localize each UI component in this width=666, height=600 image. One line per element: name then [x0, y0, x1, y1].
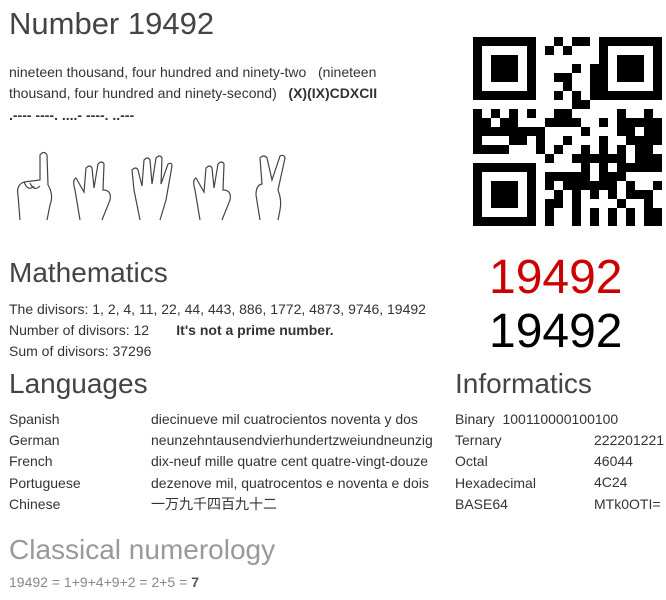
table: languages: Portuguese	[9, 475, 81, 491]
text: divisors	[9, 301, 426, 359]
QR code	[473, 37, 662, 226]
text: dix-neuf mille quatre cent quatre-vingt-douze	[151, 453, 428, 469]
text: 46044	[594, 453, 633, 469]
text: 222201221	[594, 432, 664, 448]
title: Number 19492	[9, 6, 214, 41]
table: languages: German	[9, 432, 60, 448]
heading: Languages: Languages	[9, 368, 148, 399]
table: languages	[9, 411, 81, 512]
text: MTk0OTI=	[594, 496, 661, 512]
table: informatics: Binary 100110000100100	[455, 411, 618, 427]
table: informatics: Octal	[455, 453, 488, 469]
table: informatics: Hexadecimal	[455, 475, 536, 491]
heading: Informatics: Informatics	[455, 368, 592, 399]
table: languages: French	[9, 453, 53, 469]
table: informatics: BASE64	[455, 496, 508, 512]
table: languages: Chinese	[9, 496, 60, 512]
text: divisors: The divisors: 1, 2, 4, 11, 22, 44, 443, 886, 1772, 4873, 9746, 19492	[9, 301, 426, 317]
heading: Mathematics: Mathematics	[9, 257, 168, 288]
text: number names	[9, 64, 377, 101]
text: numerology: 19492 = 1+9+4+9+2 = 2+5 = 7	[9, 574, 199, 590]
text: divisors: Number of divisors: 12 It's not a prime number.	[9, 322, 334, 338]
text: neunzehntausendvierhundertzweiundneunzig	[151, 432, 433, 448]
text: number names: thousand, four hundred and ninety-second) (X)(IX)CDXCII	[9, 85, 377, 101]
icon: hand signs	[17, 152, 286, 220]
text: dezenove mil, quatrocentos e noventa e dois	[151, 475, 429, 491]
text: divisors: Sum of divisors: 37296	[9, 343, 151, 359]
table: informatics: Ternary	[455, 432, 502, 448]
text: 一万九千四百九十二	[151, 496, 277, 512]
text: diecinueve mil cuatrocientos noventa y dos	[151, 411, 418, 427]
table: languages: Spanish	[9, 411, 60, 427]
number black: 19492	[489, 305, 622, 358]
text: number names: nineteen thousand, four hundred and ninety-two (nineteen	[9, 64, 376, 80]
heading: Classical numerology: Classical numerology	[9, 534, 275, 565]
text: morse: .---- ----. ....- ----. ..---	[9, 107, 134, 123]
table: informatics	[455, 411, 618, 512]
number red: 19492	[489, 251, 622, 304]
text: 4C24	[594, 474, 627, 490]
